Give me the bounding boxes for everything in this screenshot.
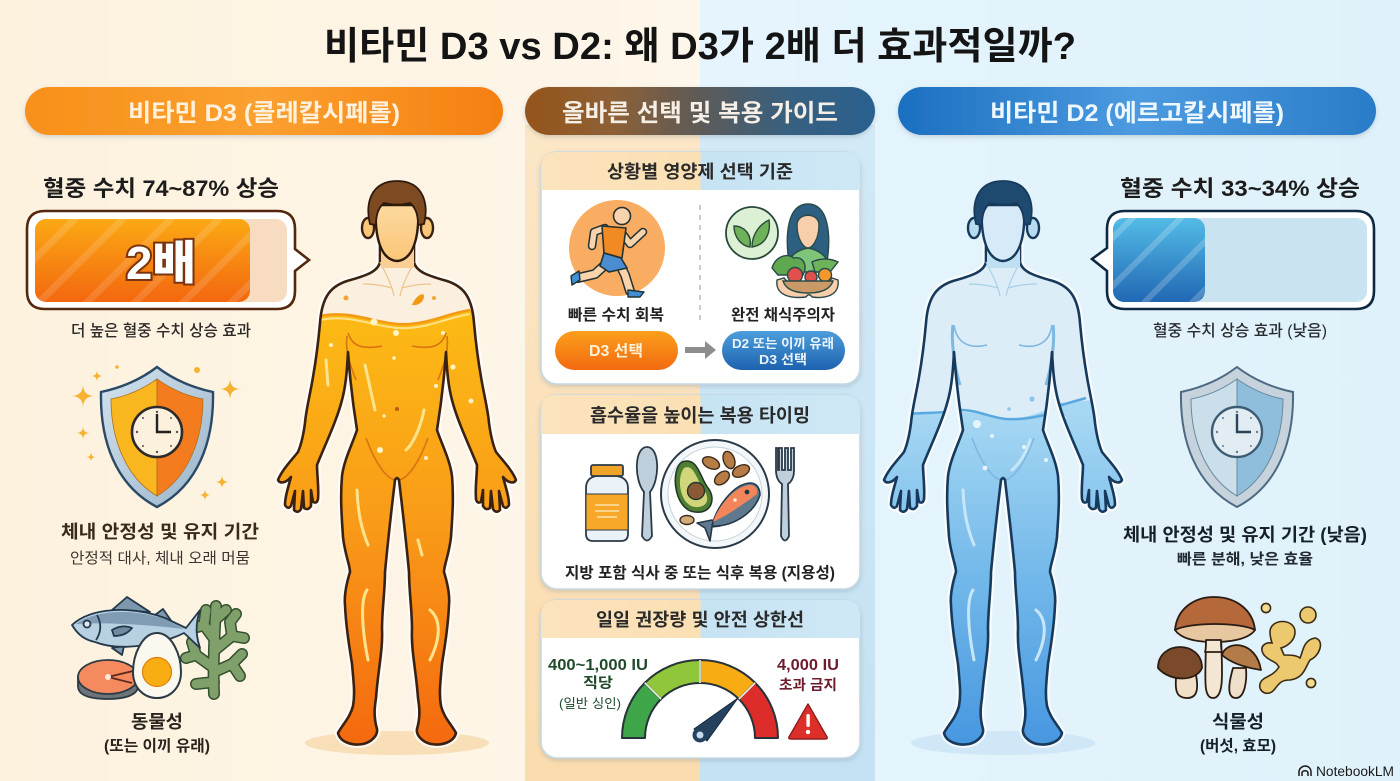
label: recommended: 직당 [583, 675, 613, 692]
icon: warning [789, 704, 827, 739]
pill: choose D2 or moss D3: D3 선택 [759, 352, 807, 367]
icon: plate [661, 440, 769, 548]
text: animal source detail: (또는 이끼 유래) [104, 737, 210, 755]
panel: daily dose [541, 600, 860, 758]
icon: D3 shield with clock [101, 367, 213, 507]
icon: notebooklm [1299, 766, 1311, 776]
label: upper limit [777, 657, 839, 694]
header: vitamin D2: 비타민 D2 (에르고칼시페롤) [990, 100, 1284, 127]
nuts [680, 450, 751, 524]
watermark: NotebookLM: NotebookLM [1316, 764, 1394, 779]
icon: fork [776, 448, 794, 540]
torso and limbs [274, 239, 520, 748]
salmon [697, 483, 760, 541]
bar: D3 2x [27, 211, 309, 309]
label: recommended: 400~1,000 IU [548, 657, 648, 674]
icon: spoon [637, 447, 657, 540]
icon: vegan woman [772, 204, 838, 297]
pill: choose D2 or moss D3 [722, 331, 845, 370]
pill: choose D2 or moss D3: D2 또는 이끼 유래 [732, 336, 834, 351]
header: vitamin D3: 비타민 D3 (콜레칼시페롤) [128, 100, 400, 127]
icon: yeast [1260, 603, 1320, 693]
header: guide [525, 87, 875, 135]
icon: runner [569, 200, 665, 297]
icon: leaf badge [726, 207, 778, 259]
icon: salmon steak [78, 660, 138, 699]
panel: dose timing [541, 395, 860, 589]
text: plant source detail: (버섯, 효모) [1200, 737, 1276, 755]
left column: D3 benefits [27, 176, 309, 755]
panel header [541, 395, 860, 434]
blue body: D2 [880, 180, 1126, 755]
header: guide: 올바른 선택 및 복용 가이드 [562, 100, 838, 127]
icon: supplement bottle [586, 465, 628, 541]
heading: D3 blood level: 혈중 수치 74~87% 상승 [43, 176, 279, 201]
panel: selection criteria [541, 152, 860, 384]
orange body: D3 [274, 180, 520, 755]
dashed divider [699, 205, 701, 320]
torso and limbs [880, 239, 1126, 748]
text: D3 metabolism: 안정적 대사, 체내 오래 머뭄 [70, 550, 250, 567]
caption: D2 bar: 혈중 수치 상승 효과 (낮음) [1153, 322, 1327, 340]
pill: choose D3 [555, 331, 678, 370]
icon: D2 shield with clock [1181, 367, 1293, 507]
right column: D2 benefits [1092, 176, 1374, 755]
label: plant source: 식물성 [1212, 712, 1264, 732]
panel header [541, 600, 860, 638]
label: D3 stability: 체내 안정성 및 유지 기간 [61, 522, 259, 542]
panel title: 흡수율을 높이는 복용 타이밍 [590, 405, 810, 426]
label: upper limit: 초과 금지 [779, 677, 837, 694]
header: vitamin D2 [898, 87, 1376, 135]
panel title: 상황별 영양제 선택 기준 [607, 162, 793, 182]
gauge needle [692, 698, 738, 742]
label: full vegetarian: 완전 채식주의자 [731, 306, 835, 324]
label: upper limit: 4,000 IU [777, 657, 839, 674]
header: vitamin D3 [25, 87, 503, 135]
label: animal source: 동물성 [131, 712, 183, 732]
label: quick recovery: 빠른 수치 회복 [568, 306, 664, 324]
avocado [675, 461, 712, 512]
head [362, 181, 433, 268]
arrow [685, 341, 716, 359]
title: 비타민 D3 vs D2: 왜 D3가 2배 더 효과적일까? [324, 26, 1076, 68]
body shadow [305, 731, 489, 755]
icon: mushrooms [1158, 597, 1261, 698]
heading: D2 blood level: 혈중 수치 33~34% 상승 [1120, 176, 1360, 201]
bar: D2 [1092, 211, 1374, 309]
text: D2 metabolism: 빠른 분해, 낮은 효율 [1177, 551, 1313, 568]
panel title: 일일 권장량 및 안전 상한선 [596, 610, 804, 630]
label: recommended: (일반 싱인) [559, 696, 621, 711]
icon: fish [72, 597, 200, 655]
bar: D3 2x: 2배 [126, 237, 196, 289]
label: D2 stability: 체내 안정성 및 유지 기간 (낮음) [1123, 525, 1367, 545]
head [968, 181, 1039, 268]
caption: D3 bar: 더 높은 혈중 수치 상승 효과 [71, 322, 251, 340]
gauge [622, 660, 778, 738]
icon: egg [133, 633, 181, 698]
label: recommended [548, 657, 648, 711]
icon: seaweed [186, 606, 244, 694]
icon: sparkles [71, 365, 241, 501]
text: timing: 지방 포함 식사 중 또는 식후 복용 (지용성) [565, 564, 835, 582]
pill: choose D3: D3 선택 [589, 342, 643, 360]
body shadow [911, 731, 1095, 755]
panel header [541, 152, 860, 190]
